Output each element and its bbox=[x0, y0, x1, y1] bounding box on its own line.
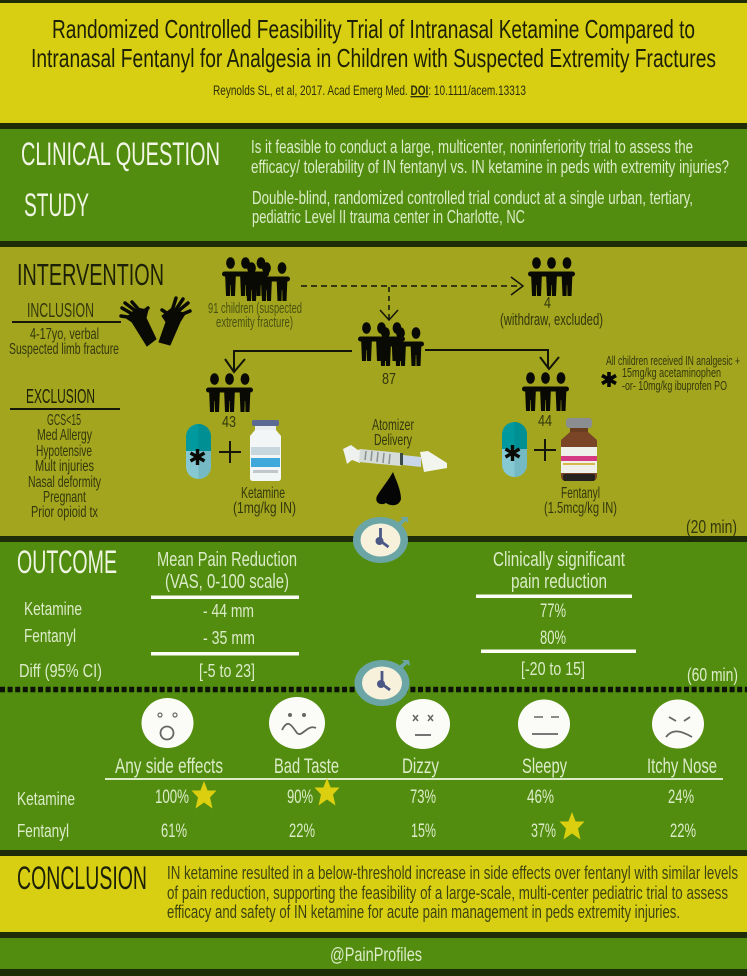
side effects row: fentanyl: 61% bbox=[161, 821, 187, 842]
icon: ketamine vial bbox=[250, 420, 281, 481]
study text: pediatric Level II trauma center in Charlotte, NC bbox=[252, 207, 525, 227]
column header: mean pain reduction: (VAS, 0-100 scale) bbox=[165, 571, 289, 593]
icon: fentanyl vial bbox=[561, 418, 597, 481]
face: any side effects bbox=[142, 698, 194, 748]
side effects row: ketamine: 73% bbox=[410, 787, 436, 808]
icon: plus ketamine bbox=[219, 441, 241, 463]
inclusion criteria: INCLUSION bbox=[27, 300, 94, 322]
side effects row: ketamine: 90% bbox=[287, 787, 313, 808]
label: atomizer delivery: Delivery bbox=[374, 432, 412, 449]
heading: study: STUDY bbox=[24, 187, 89, 223]
mean pain reduction values: - 35 mm bbox=[203, 628, 255, 648]
label: ketamine dose bbox=[233, 485, 296, 517]
side effects row: ketamine: 24% bbox=[668, 787, 694, 808]
label: 91 children bbox=[208, 300, 302, 331]
icon: nose bbox=[376, 472, 401, 505]
label: 91 children: 91 children (suspected bbox=[208, 300, 302, 317]
side effects row: ketamine: 100% bbox=[155, 787, 189, 808]
exclusion criteria bbox=[10, 386, 120, 521]
icon: atomizer syringe bbox=[343, 445, 447, 472]
icon: star sleepy bbox=[560, 812, 584, 840]
label: fentanyl dose: (1.5mcg/kg IN) bbox=[544, 500, 617, 517]
inclusion criteria: 4-17yo, verbal bbox=[30, 326, 99, 343]
note: all children analgesic bbox=[606, 354, 740, 393]
icon: ketamine group bbox=[206, 373, 253, 412]
arrow: to fentanyl arm bbox=[425, 350, 559, 369]
label: atomizer delivery: Atomizer bbox=[372, 417, 414, 434]
side effect column headings bbox=[105, 755, 723, 780]
side effect column headings: Dizzy bbox=[402, 755, 439, 778]
label: fentanyl dose: Fentanyl bbox=[561, 485, 600, 502]
side effects row: fentanyl: 37% bbox=[531, 821, 556, 842]
column header: mean pain reduction: Mean Pain Reduction bbox=[157, 549, 297, 571]
exclusion criteria: EXCLUSION bbox=[26, 386, 95, 408]
label: withdrawn: 4 bbox=[544, 295, 551, 312]
icon: injured hands bbox=[121, 298, 190, 346]
panel: clinical question and study bbox=[0, 129, 747, 241]
row labels: Fentanyl bbox=[24, 626, 76, 646]
label: ketamine dose: Ketamine bbox=[241, 485, 285, 502]
side effects row: ketamine: 46% bbox=[527, 787, 554, 808]
label: withdrawn bbox=[500, 295, 603, 329]
label: withdrawn: (withdraw, excluded) bbox=[500, 310, 603, 329]
mean pain reduction values: - 44 mm bbox=[203, 601, 254, 621]
side effects row: ketamine: Ketamine bbox=[17, 789, 75, 809]
title bbox=[31, 14, 716, 73]
icon: 60 minute clock bbox=[354, 660, 410, 706]
face: dizzy bbox=[396, 699, 450, 749]
label: atomizer delivery bbox=[372, 417, 414, 449]
icon: 91 children group bbox=[222, 257, 290, 301]
panel: title header bbox=[0, 3, 747, 123]
side effects row: fentanyl bbox=[17, 821, 696, 842]
column header: clinically significant: Clinically significant bbox=[493, 549, 625, 571]
face: itchy nose bbox=[652, 700, 704, 748]
face: sleepy bbox=[518, 700, 570, 748]
heading: intervention: INTERVENTION bbox=[17, 257, 164, 292]
side effects row: fentanyl: 22% bbox=[670, 821, 696, 842]
mean pain reduction values bbox=[151, 601, 299, 681]
side effects row: fentanyl: 22% bbox=[289, 821, 315, 842]
arrow: dashed to withdrawn bbox=[301, 277, 523, 295]
side effect column headings: Itchy Nose bbox=[647, 755, 717, 778]
icon: fentanyl group bbox=[522, 372, 569, 411]
heading: conclusion: CONCLUSION bbox=[17, 860, 147, 896]
exclusion criteria: Mult injuries bbox=[35, 458, 94, 475]
face: bad taste bbox=[269, 697, 325, 749]
arrow: to ketamine arm bbox=[225, 351, 352, 372]
inclusion criteria: Suspected limb fracture bbox=[9, 341, 119, 358]
label: fentanyl dose bbox=[544, 485, 617, 517]
conclusion text bbox=[167, 863, 738, 922]
study text bbox=[252, 188, 693, 227]
exclusion criteria: Pregnant bbox=[43, 489, 86, 506]
exclusion criteria: Hypotensive bbox=[36, 443, 92, 460]
clinical question text bbox=[251, 137, 729, 177]
icon: 87 children group bbox=[358, 322, 424, 366]
icon: fentanyl analgesic pill bbox=[502, 422, 527, 477]
label: 87: 87 bbox=[382, 371, 396, 388]
exclusion criteria: Prior opioid tx bbox=[31, 504, 98, 521]
panel: intervention bbox=[0, 247, 747, 537]
exclusion criteria: GCS<15 bbox=[47, 412, 81, 429]
label: 43: 43 bbox=[222, 414, 236, 431]
panel: footer bbox=[0, 938, 747, 969]
icon: star bad taste bbox=[314, 778, 340, 806]
label: 91 children: extremity fracture) bbox=[216, 314, 293, 331]
row labels bbox=[19, 599, 102, 681]
icon: analgesic asterisk bbox=[602, 372, 616, 387]
column header: mean pain reduction bbox=[151, 549, 299, 599]
icon: 20 minute clock bbox=[353, 517, 408, 563]
icon: star any side effects bbox=[192, 781, 216, 808]
inclusion criteria bbox=[9, 300, 121, 358]
exclusion criteria: Med Allergy bbox=[37, 427, 92, 444]
side effect column headings: Sleepy bbox=[522, 755, 567, 778]
label: ketamine dose: (1mg/kg IN) bbox=[233, 500, 296, 517]
panel: outcome bbox=[0, 542, 747, 850]
icon: plus fentanyl bbox=[534, 439, 556, 461]
footer handle: @PainProfiles bbox=[330, 945, 422, 966]
side effect column headings: Any side effects bbox=[115, 755, 223, 778]
column header: clinically significant bbox=[476, 549, 632, 598]
column header: clinically significant: pain reduction bbox=[511, 571, 607, 593]
mean pain reduction values: [-5 to 23] bbox=[199, 661, 255, 681]
label: 44: 44 bbox=[538, 413, 552, 430]
exclusion criteria: Nasal deformity bbox=[28, 474, 101, 491]
row labels: Diff (95% CI) bbox=[19, 661, 102, 681]
heading: outcome: OUTCOME bbox=[17, 544, 117, 580]
side effects row: fentanyl: Fentanyl bbox=[17, 821, 69, 841]
side effects row: ketamine bbox=[17, 787, 694, 809]
clinically significant values: 80% bbox=[540, 628, 566, 649]
icon: withdrawn group bbox=[528, 257, 575, 296]
clinically significant values bbox=[481, 601, 636, 679]
icon: ketamine analgesic pill bbox=[186, 424, 211, 479]
citation: Reynolds SL, et al, 2017. Acad Emerg Med. DOI: 10.1111/acem.13313 bbox=[213, 83, 526, 98]
panel: conclusion bbox=[0, 856, 747, 932]
side effects row: fentanyl: 15% bbox=[411, 821, 436, 842]
row labels: Ketamine bbox=[24, 599, 82, 619]
heading: clinical question: CLINICAL QUESTION bbox=[21, 136, 220, 172]
clinically significant values: 77% bbox=[540, 601, 566, 622]
side effect column headings: Bad Taste bbox=[274, 755, 339, 778]
clinically significant values: [-20 to 15] bbox=[521, 659, 585, 679]
arrow: dashed to enrolled bbox=[380, 287, 398, 320]
